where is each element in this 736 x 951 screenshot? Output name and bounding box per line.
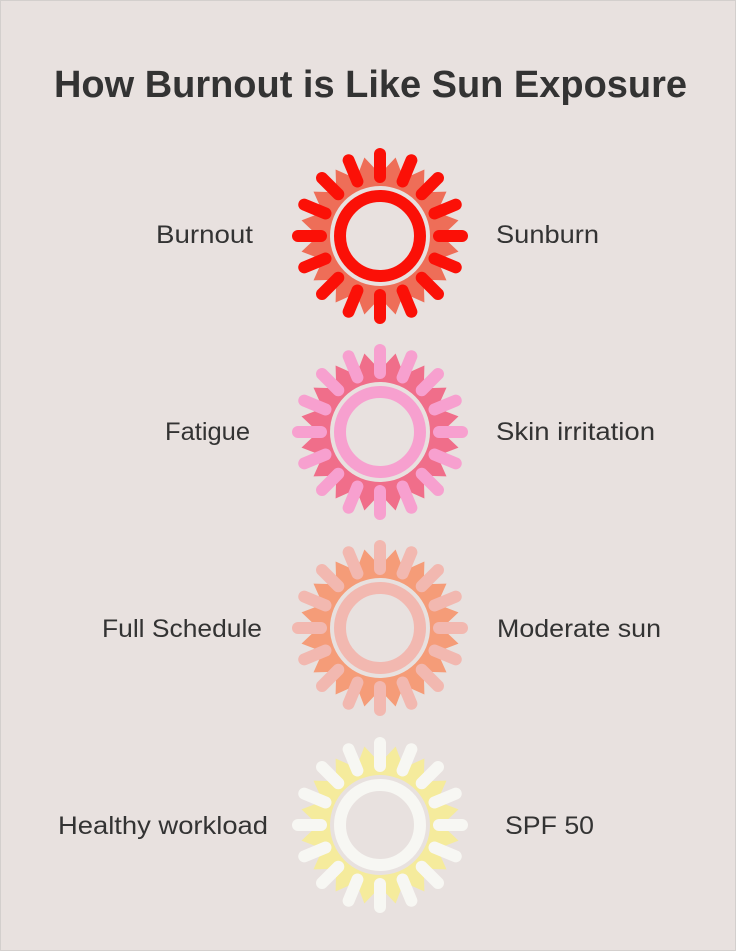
icon: pink sun bbox=[298, 350, 462, 514]
row 3: full schedule / moderate sun bbox=[102, 546, 661, 710]
label: Sunburn: Sunburn bbox=[496, 221, 599, 249]
label: Fatigue: Fatigue bbox=[165, 418, 250, 446]
label: Moderate sun: Moderate sun bbox=[497, 615, 661, 643]
row 1: burnout / sunburn bbox=[156, 154, 599, 318]
label: Burnout: Burnout bbox=[156, 221, 253, 249]
label: Healthy workload: Healthy workload bbox=[58, 812, 268, 840]
label: Skin irritation: Skin irritation bbox=[496, 418, 655, 446]
icon: peach sun bbox=[298, 546, 462, 710]
label: SPF 50: SPF 50 bbox=[505, 812, 594, 840]
label: Full Schedule: Full Schedule bbox=[102, 615, 262, 643]
row 4: healthy workload / SPF 50 bbox=[58, 743, 594, 907]
icon: red sun bbox=[298, 154, 462, 318]
icon: pale sun bbox=[298, 743, 462, 907]
row 2: fatigue / skin irritation bbox=[165, 350, 655, 514]
title: How Burnout is Like Sun Exposure bbox=[54, 64, 687, 106]
